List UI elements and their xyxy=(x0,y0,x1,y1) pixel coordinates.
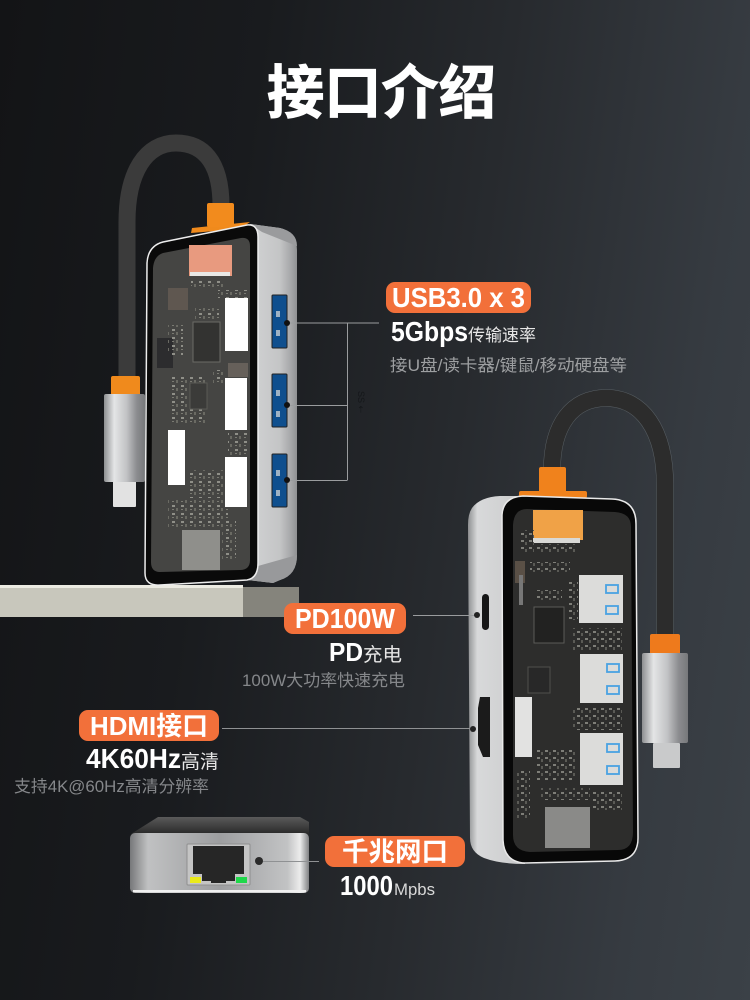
HDMI port xyxy=(478,697,490,757)
icon: cable xyxy=(127,143,221,380)
leader dot xyxy=(255,857,263,865)
device: USB hub, right view xyxy=(468,398,688,864)
resolution text: 高清 xyxy=(181,751,219,773)
power text: 充电 xyxy=(363,644,402,666)
hub glass front xyxy=(502,496,638,863)
callout: PD100W xyxy=(242,603,406,690)
device: USB hub, left view xyxy=(104,143,297,585)
icon: cable strain relief xyxy=(191,203,250,233)
USB 3.0 ports xyxy=(272,295,287,507)
port symbol: SS: SS ⇠ xyxy=(356,391,366,414)
icon: cable strain relief xyxy=(519,467,587,498)
hub silver body xyxy=(240,224,297,583)
description: 100W大功率快速充电 xyxy=(242,671,405,690)
USB-C port xyxy=(482,594,489,630)
callout leader: USB-C xyxy=(413,612,480,618)
pill label: 千兆网口 xyxy=(342,837,448,867)
callout leader: HDMI xyxy=(222,726,476,732)
pill label: USB3.0 x 3 xyxy=(392,282,525,313)
resolution text: 4K60Hz xyxy=(86,743,181,774)
title: 接口介绍 xyxy=(267,61,496,126)
callout: gigabit Ethernet xyxy=(325,836,465,901)
pill label: HDMI接口 xyxy=(90,711,208,741)
hub silver body xyxy=(468,496,530,864)
callout leader: USB ports bracket xyxy=(284,320,379,483)
speed text: 1000 xyxy=(340,870,393,901)
speed text xyxy=(340,870,435,901)
icon: USB-C connector xyxy=(642,634,688,768)
speed text: Mpbs xyxy=(394,881,435,899)
hub glass front xyxy=(145,225,258,585)
speed text: 5Gbps xyxy=(391,316,468,347)
power text xyxy=(329,637,402,667)
icon: RJ45 port xyxy=(187,844,250,885)
device: Ethernet end view xyxy=(130,817,309,893)
description: 支持4K@60Hz高清分辨率 xyxy=(14,777,209,796)
power text: PD xyxy=(329,637,363,667)
callout: HDMI xyxy=(14,710,219,796)
icon: USB-C connector xyxy=(104,376,145,507)
platform xyxy=(0,585,299,617)
callout: USB3.0 x 3 xyxy=(386,282,627,375)
icon: cable xyxy=(552,398,665,636)
description: 接U盘/读卡器/键鼠/移动硬盘等 xyxy=(390,356,627,375)
pill label: PD100W xyxy=(295,603,396,634)
circuit board, right view xyxy=(513,509,633,852)
speed text xyxy=(391,316,536,347)
speed text: 传输速率 xyxy=(468,326,536,345)
callout leader: Ethernet xyxy=(263,860,319,862)
circuit board, left view xyxy=(151,238,250,572)
